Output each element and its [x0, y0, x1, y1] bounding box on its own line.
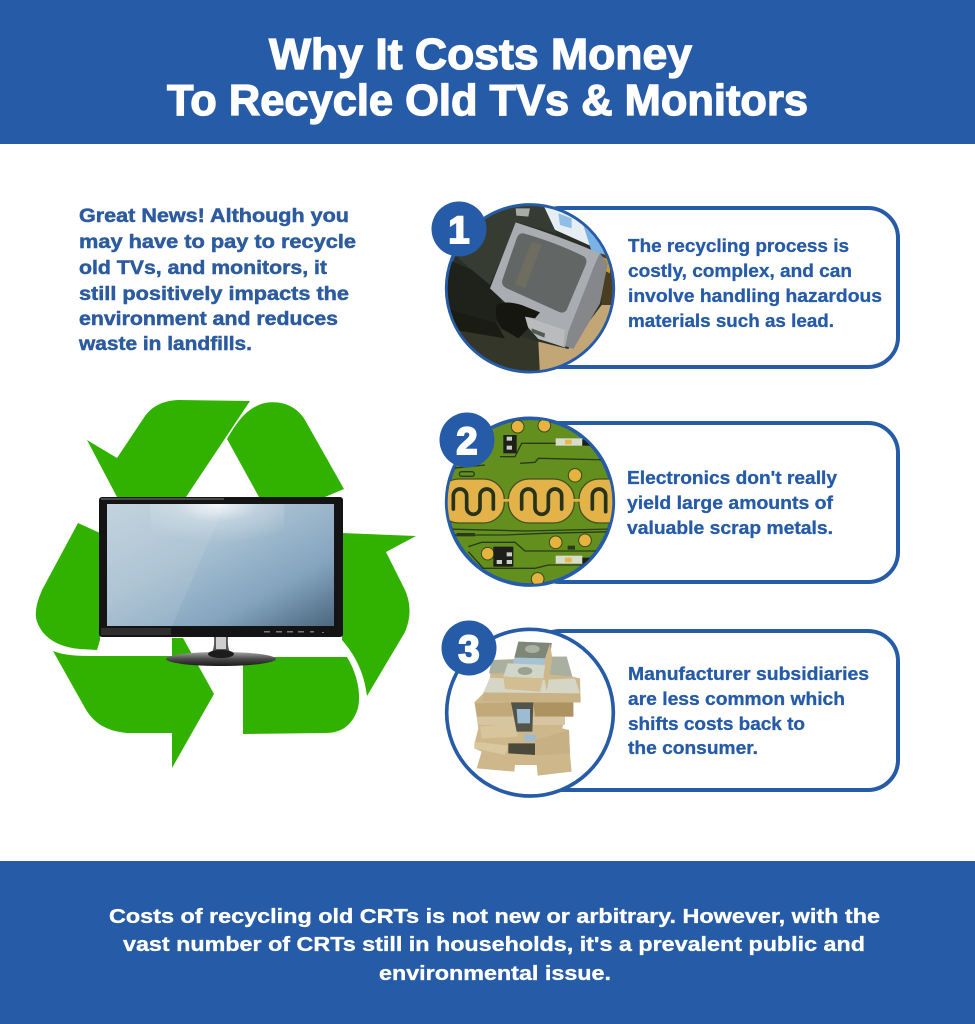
panel outline 2	[530, 423, 898, 582]
icon: recycling arrows with monitor	[36, 400, 416, 768]
photo: green circuit board	[444, 416, 616, 587]
photo: man carrying an old CRT television	[445, 205, 618, 375]
text: reason 3: are less common which	[628, 689, 845, 709]
text: reason 1: materials such as lead.	[628, 311, 834, 331]
intro text block: waste in landfills.	[78, 334, 252, 355]
photo: stack of banknote bundles	[447, 629, 613, 796]
intro text block: environment and reduces	[79, 309, 338, 330]
badge: number 2: 2	[456, 421, 478, 463]
footer text: environmental issue.	[379, 963, 611, 985]
header band	[0, 0, 975, 144]
intro text block: may have to pay to recycle	[79, 232, 356, 253]
text: reason 3: shifts costs back to	[628, 714, 805, 734]
intro text block: still positively impacts the	[79, 284, 349, 305]
text: reason 1: The recycling process is	[628, 236, 849, 256]
text: reason 2: yield large amounts of	[627, 493, 834, 513]
intro text block	[78, 206, 356, 355]
badge: number 2	[440, 412, 494, 468]
text: reason 1	[628, 236, 882, 331]
badge: number 3: 3	[458, 629, 480, 671]
badge: number 3	[442, 620, 496, 676]
title: Why It Costs Money	[269, 30, 693, 79]
intro text block: Great News! Although you	[79, 206, 349, 227]
text: reason 3	[628, 664, 869, 758]
text: reason 2	[627, 468, 837, 538]
footer text: Costs of recycling old CRTs is not new or arbitrary. However, with the	[109, 906, 880, 928]
icon: flat screen monitor	[99, 497, 343, 666]
footer text: vast number of CRTs still in households, it's a prevalent public and	[123, 934, 865, 956]
title: To Recycle Old TVs & Monitors	[167, 76, 808, 125]
panel outline 1	[530, 208, 898, 367]
panel outline 3	[530, 631, 898, 790]
panel: reason 3	[442, 620, 898, 796]
panel: reason 2	[438, 412, 898, 585]
text: reason 2: valuable scrap metals.	[627, 518, 833, 538]
badge: number 1: 1	[448, 210, 470, 252]
footer text	[109, 906, 880, 985]
panel: reason 1	[432, 202, 898, 375]
text: reason 1: involve handling hazardous	[628, 286, 882, 306]
badge: number 1	[432, 202, 486, 256]
icon: green recycling arrows	[36, 400, 416, 768]
text: reason 2: Electronics don't really	[627, 468, 837, 488]
footer band	[0, 861, 975, 1024]
text: reason 3: the consumer.	[628, 738, 758, 758]
intro text block: old TVs, and monitors, it	[79, 258, 328, 279]
text: reason 3: Manufacturer subsidiaries	[628, 664, 869, 684]
title	[167, 30, 808, 125]
text: reason 1: costly, complex, and can	[628, 261, 852, 281]
